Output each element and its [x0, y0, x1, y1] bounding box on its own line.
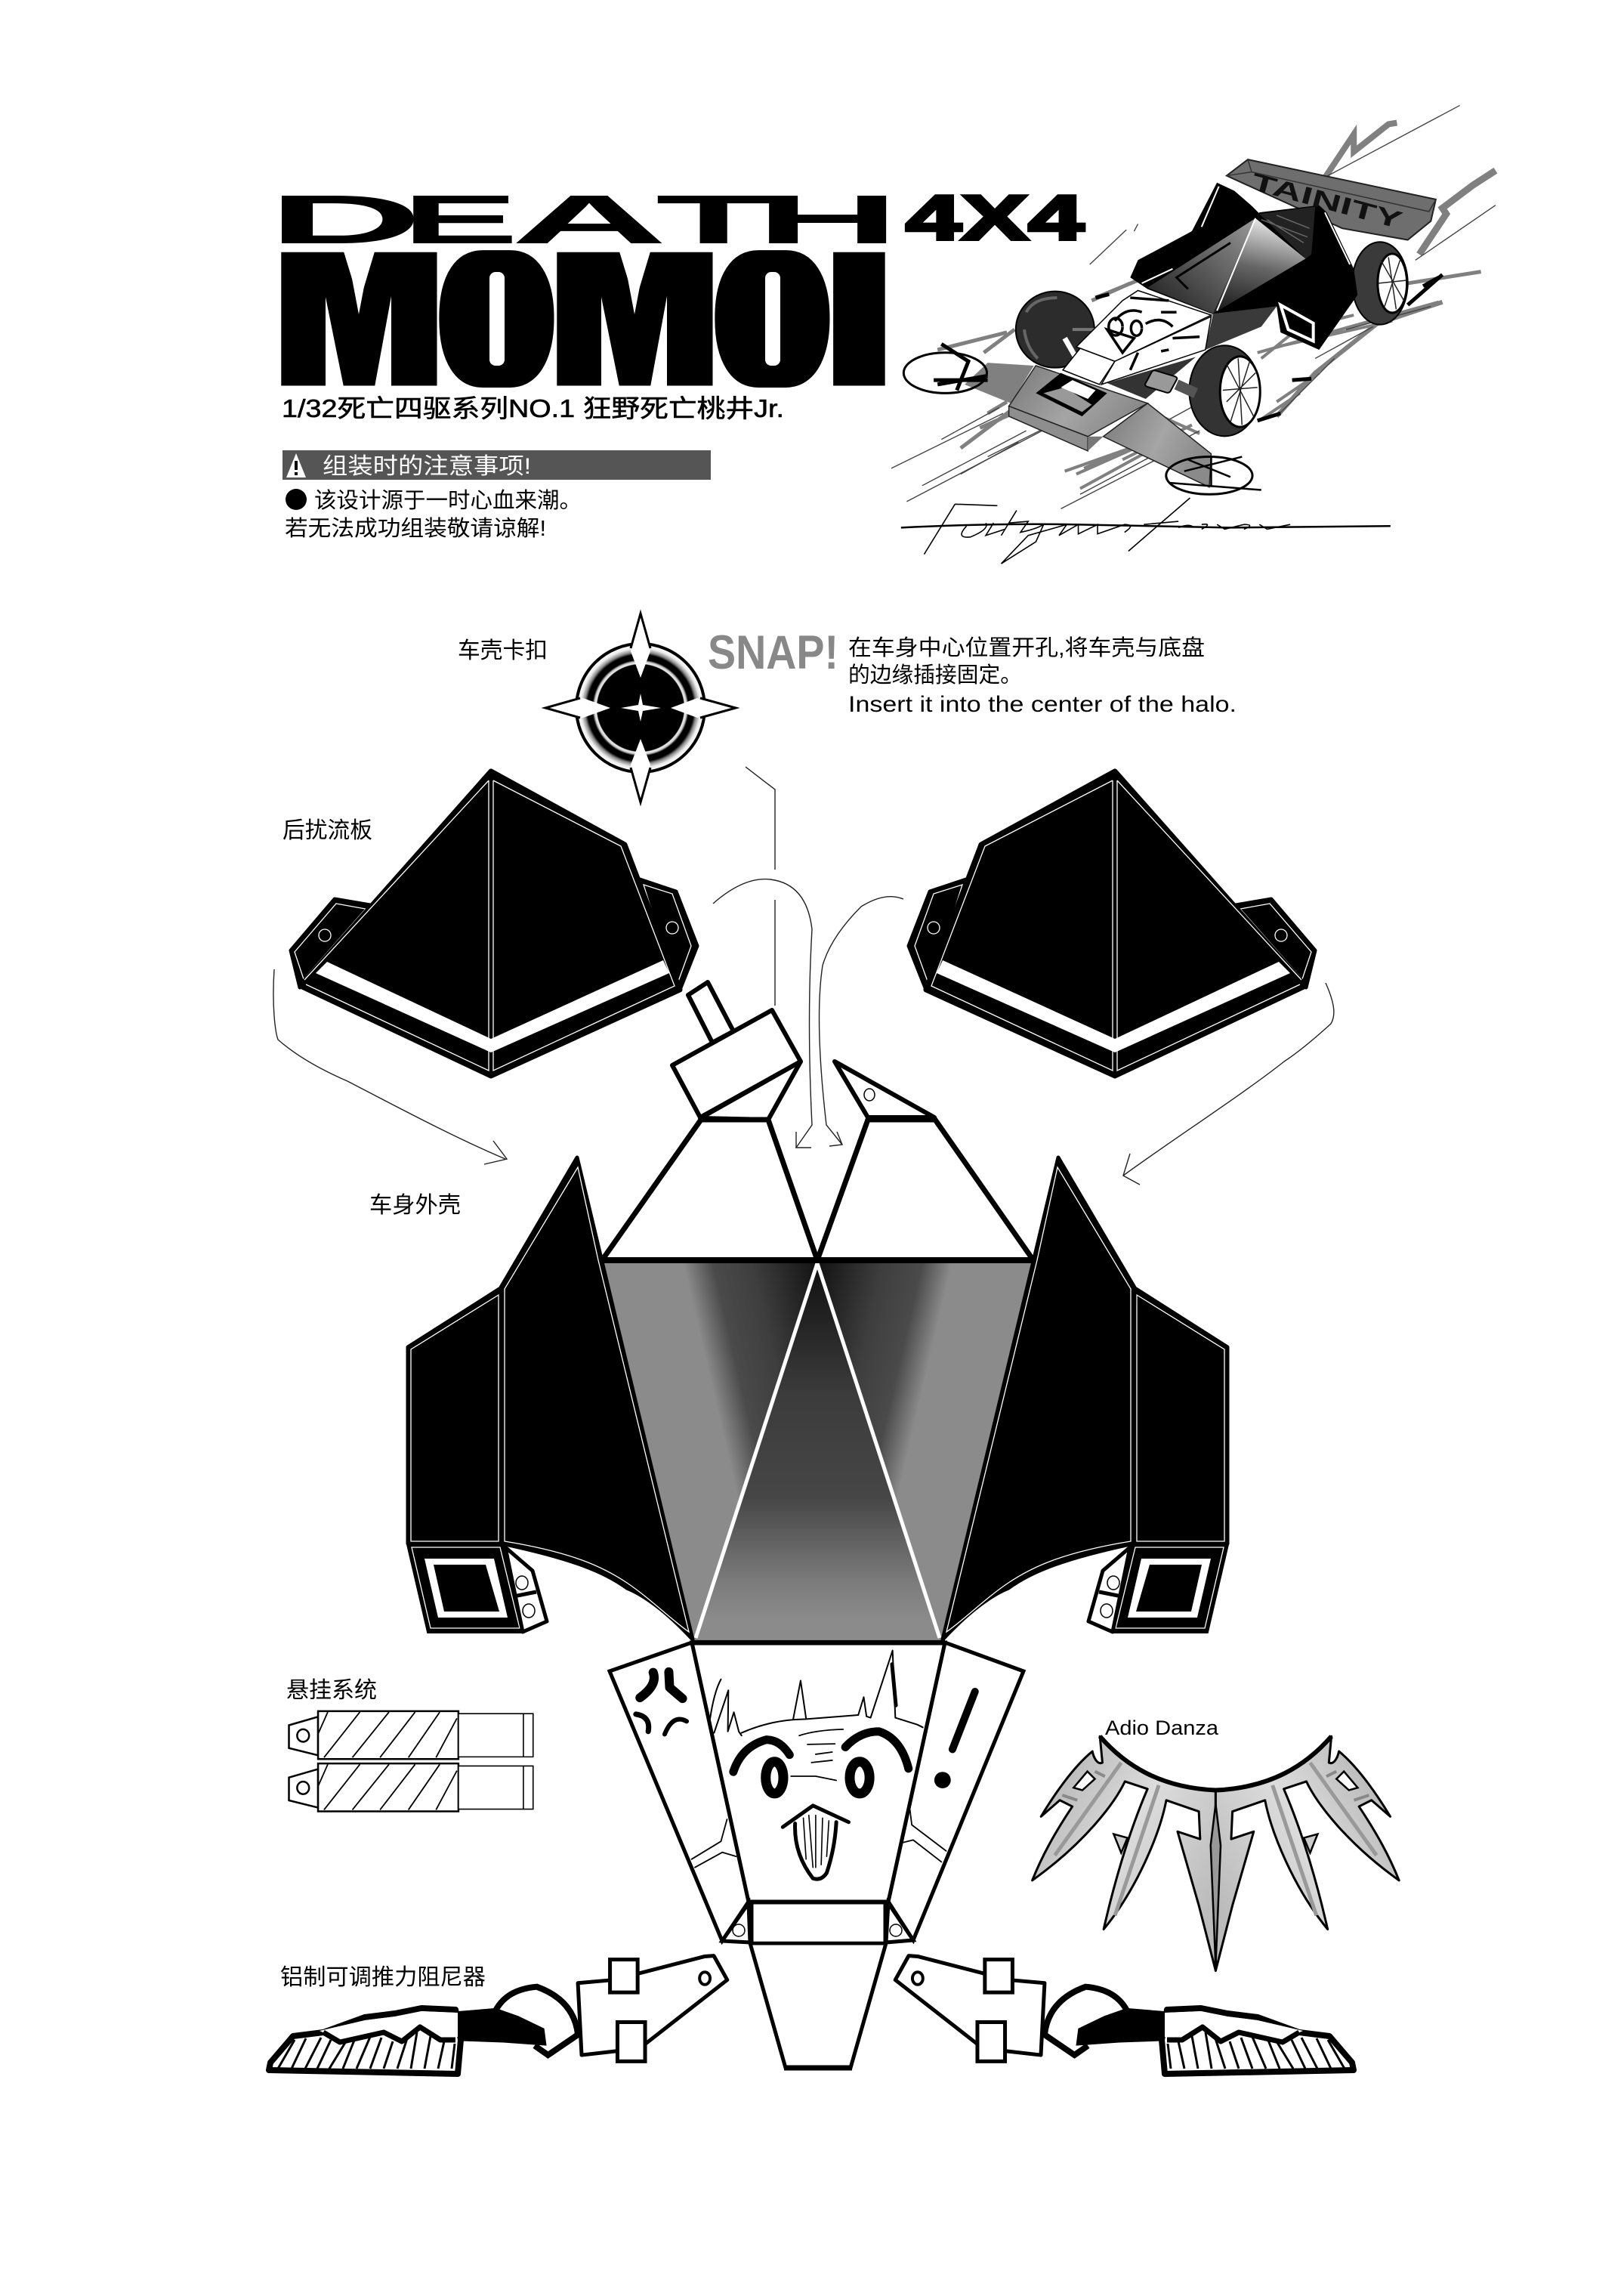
label: damper: 铝制可调推力阻尼器: [280, 1965, 486, 1990]
car: left front wheel: [1016, 292, 1095, 368]
spoiler tab left: [291, 899, 370, 987]
label: rear spoiler: 后扰流板: [283, 818, 372, 843]
top tab right: [835, 1062, 934, 1117]
snap instructions: 在车身中心位置开孔,将车壳与底盘: [848, 635, 1205, 660]
snap instructions: 的边缘插接固定。: [848, 663, 1022, 688]
left damper: [269, 1956, 727, 2074]
subtitle: 1/32死亡四驱系列NO.1 狂野死亡桃井Jr.: [282, 394, 784, 422]
snap instructions: [848, 635, 1237, 717]
car: canopy: [1147, 207, 1315, 314]
lower nose tab: [750, 1943, 886, 2068]
car: body shell: [1130, 183, 1357, 350]
title: 4X4: 4X4: [906, 182, 1084, 253]
damper clips: [610, 1960, 645, 2061]
hood top edge: [601, 1257, 1035, 1263]
nose face panel: [692, 1642, 945, 1902]
note text block: [285, 488, 582, 541]
warning bar: [283, 450, 711, 480]
car: undercarriage: [1107, 307, 1277, 399]
right rear spoiler: [909, 771, 1315, 1076]
damper loop: [496, 1987, 578, 2055]
note text block: 若无法成功组装敬请谅解!: [285, 516, 546, 541]
brows: [733, 1732, 909, 1772]
nose side panels: [610, 1642, 1023, 1941]
title: DEATH: H: [755, 181, 900, 258]
title: MOMOI: I: [835, 212, 883, 426]
warning heading: 组装时的注意事项!: [323, 454, 531, 479]
left black wing: [408, 1157, 693, 1639]
necklace left half: [1033, 1736, 1215, 1970]
icon: warning triangle: [286, 453, 306, 477]
wing lettering: TAINITY: [1249, 168, 1406, 234]
necklace centre blade: [1211, 1804, 1221, 1966]
label: body clip: 车壳卡扣: [458, 638, 548, 663]
damper black coupling: [458, 2008, 547, 2046]
white upper panels: [602, 1120, 1033, 1260]
car: front plate: [965, 363, 1211, 487]
nose face drawing: [636, 1651, 975, 1879]
damper foot: [269, 2008, 461, 2074]
title: DEATH: E: [402, 181, 519, 258]
car: motion scribble marks: [1095, 274, 1443, 421]
title: MOMOI: O: [724, 212, 822, 426]
spoiler body: [301, 771, 680, 1076]
car: rear wheel: [1352, 242, 1408, 325]
top tab left: [672, 982, 934, 1120]
title: DEATH: D: [267, 181, 423, 258]
left rear spoiler: [291, 771, 697, 1076]
signature: [901, 498, 1391, 564]
title: DEATH: T: [656, 181, 771, 258]
grey hood panels: [602, 1262, 1033, 1639]
right black wing: [943, 1157, 1227, 1639]
car: right front wheel: [1189, 345, 1260, 436]
car: rear wing: [1227, 159, 1436, 240]
necklace: Adio Danza: [1033, 1736, 1399, 1970]
damper arm: [578, 1956, 727, 2055]
face details: [791, 1729, 843, 1780]
car: rear diamond: [1280, 305, 1314, 341]
spoiler white band: [316, 960, 669, 1052]
SNAP label: SNAP!: [708, 626, 838, 679]
bumper tabs: [722, 1903, 913, 1942]
body shell: [408, 982, 1227, 1639]
label: suspension: 悬挂系统: [286, 1678, 377, 1703]
car: scribbled front axle circles: [903, 344, 1261, 494]
title: MOMOI: M: [283, 212, 436, 426]
label: Adio Danza: Adio Danza: [1105, 1717, 1219, 1739]
nose section: [610, 1642, 1023, 2068]
suspension parts: [289, 1711, 533, 1812]
snap instructions: Insert it into the center of the halo.: [848, 692, 1237, 717]
title: MOMOI: O: [447, 212, 545, 426]
car: axle spring: [1144, 369, 1196, 394]
necklace right half: [1215, 1736, 1399, 1970]
tongue: [783, 1806, 849, 1879]
title: DEATH: A: [511, 181, 668, 258]
bumper holes: [733, 1924, 902, 1936]
hair: [710, 1651, 923, 1735]
title: MOMOI: M: [558, 212, 712, 426]
angry mark: [636, 1672, 687, 1734]
icon: halo clip: [545, 613, 736, 802]
right damper: [895, 1956, 1354, 2074]
tab hole: [864, 1089, 875, 1101]
note text block: 该设计源于一时心血来潮。: [314, 488, 582, 513]
title letter counter highlights: [326, 251, 794, 387]
illustration: race car with speed lines: [891, 106, 1496, 508]
spoiler tab right: [640, 879, 697, 990]
assembly arrows: [273, 767, 1334, 1185]
suspension upper: [289, 1711, 533, 1759]
nose side lines: [692, 1807, 946, 1868]
eyes: [766, 1762, 869, 1794]
label: body shell: 车身外壳: [369, 1193, 461, 1218]
suspension lower: [289, 1763, 533, 1812]
car: nose: [1063, 290, 1211, 385]
exclamation mark: [934, 1692, 975, 1788]
bumper: [750, 1902, 888, 1942]
